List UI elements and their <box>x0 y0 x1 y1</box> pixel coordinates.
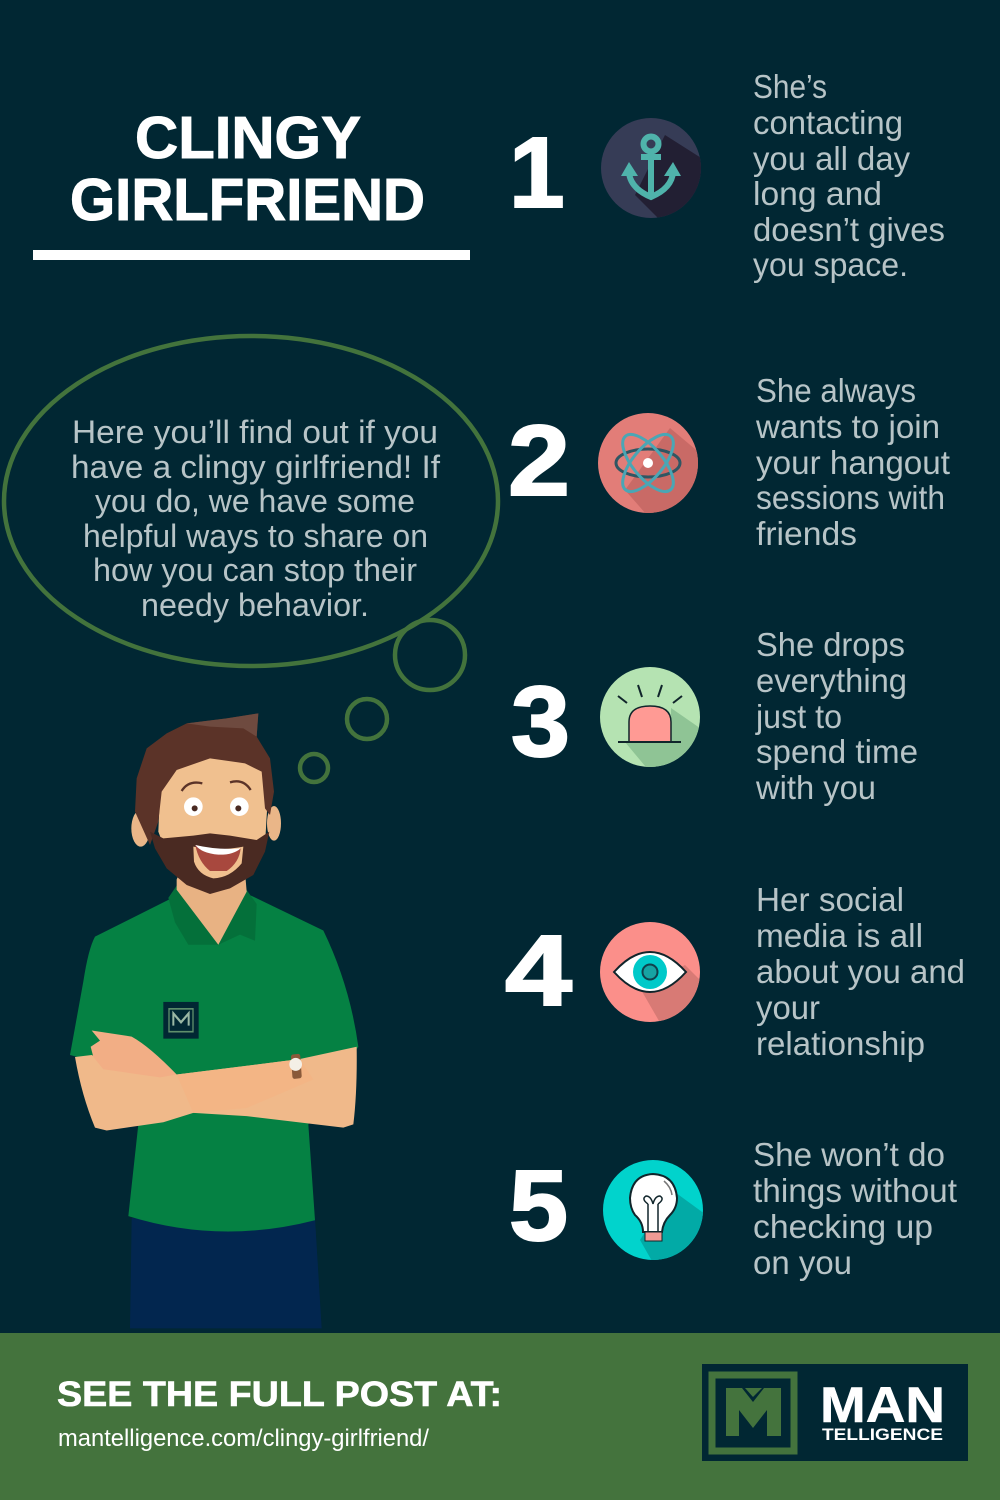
text: item 3: spend time <box>756 733 918 770</box>
text: item 1: you all day <box>753 140 910 177</box>
logo: Mantelligence: TELLIGENCE <box>822 1426 943 1444</box>
text: item 3: She drops <box>756 626 905 663</box>
man body <box>70 871 358 1328</box>
text: item 5: checking up <box>753 1208 933 1245</box>
text: item 5 <box>753 1136 957 1281</box>
thought bubble: how you can stop their <box>93 552 417 588</box>
title: GIRLFRIEND <box>70 167 425 233</box>
text: item 1: She’s <box>753 68 827 105</box>
icon: anchor <box>601 118 701 218</box>
text: item 4: Her social <box>756 881 904 918</box>
item 1: 1 <box>509 117 565 229</box>
text: item 2 <box>755 372 950 552</box>
text: item 4: media is all <box>756 917 923 954</box>
text: item 3: with you <box>755 769 876 806</box>
thought bubble: have a clingy girlfriend! If <box>71 449 440 485</box>
text: item 1: long and <box>753 175 882 212</box>
thought bubble: you do, we have some <box>95 483 415 519</box>
illustration: bearded man with crossed arms <box>70 713 358 1328</box>
text: item 3 <box>755 626 918 806</box>
text: item 3: everything <box>756 662 907 699</box>
item 2 <box>508 372 950 552</box>
footer call to action: SEE THE FULL POST AT: <box>57 1375 502 1414</box>
footer url: mantelligence.com/clingy-girlfriend/ <box>58 1425 429 1452</box>
item 3 <box>511 626 918 806</box>
logo: Mantelligence: MAN <box>820 1377 945 1433</box>
text: item 5: things without <box>753 1172 957 1209</box>
text: item 5: on you <box>753 1244 852 1281</box>
thought bubble <box>4 336 498 782</box>
item 1 <box>509 68 945 283</box>
text: item 2: She always <box>756 372 916 409</box>
icon: light bulb <box>603 1160 703 1260</box>
text: item 1 <box>753 68 945 283</box>
footer band <box>0 1333 1000 1500</box>
title: CLINGY <box>135 105 361 171</box>
text: item 4: relationship <box>756 1025 925 1062</box>
thought bubble: Here you’ll find out if you <box>72 414 438 450</box>
text: item 3: just to <box>755 698 842 735</box>
item 3: 3 <box>511 666 570 778</box>
text: item 1: contacting <box>753 104 903 141</box>
thought bubble: needy behavior. <box>141 587 369 623</box>
icon: atom <box>598 413 698 513</box>
thought bubble: helpful ways to share on <box>83 518 428 554</box>
text: item 1: doesn’t gives <box>753 211 945 248</box>
text: item 5: She won’t do <box>753 1136 945 1173</box>
man head <box>131 713 281 894</box>
item 4: 4 <box>505 915 572 1027</box>
text: item 2: your hangout <box>756 444 950 481</box>
text: item 4 <box>756 881 965 1062</box>
title <box>33 105 470 260</box>
item 5: 5 <box>509 1150 568 1262</box>
item 5 <box>509 1136 957 1281</box>
logo: Mantelligence <box>702 1364 968 1461</box>
icon: siren <box>600 667 700 767</box>
item 4 <box>505 881 965 1062</box>
text: item 2: sessions with <box>756 479 945 516</box>
text: item 2: friends <box>756 515 857 552</box>
text: item 4: about you and <box>756 953 965 990</box>
text: item 2: wants to join <box>755 408 940 445</box>
item 2: 2 <box>508 405 570 517</box>
icon: eye <box>600 922 700 1022</box>
text: item 1: you space. <box>753 246 908 283</box>
text: item 4: your <box>756 989 820 1026</box>
